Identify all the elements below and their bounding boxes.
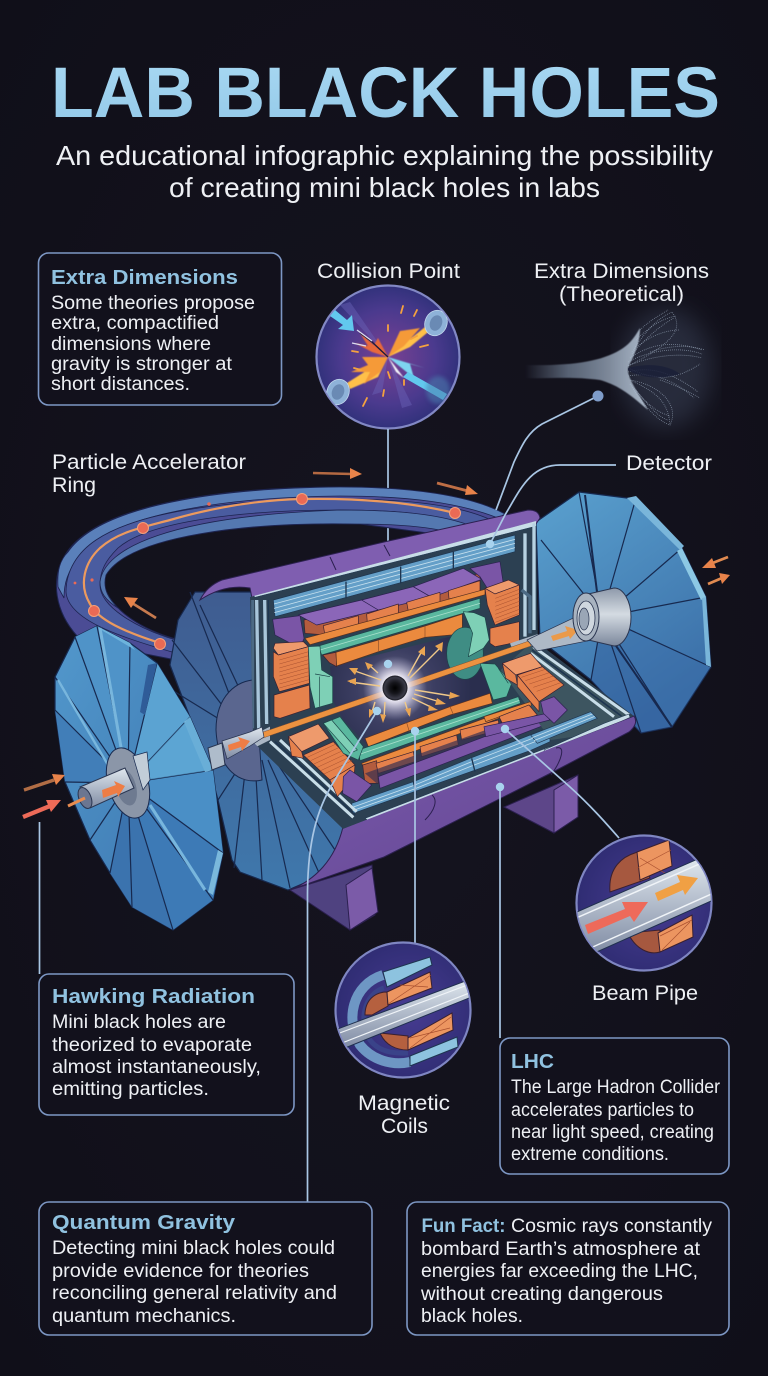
panel: extra dimensions: extra, compactified bbox=[51, 313, 219, 334]
label: detector: Detector bbox=[626, 451, 712, 475]
panel: lhc: extreme conditions. bbox=[511, 1144, 669, 1165]
particle accelerator ring bbox=[56, 487, 505, 660]
right rails bbox=[531, 647, 629, 717]
hub bbox=[99, 743, 157, 823]
panel: quantum gravity: Quantum Gravity bbox=[52, 1212, 236, 1234]
panel: fun fact bbox=[407, 1202, 729, 1335]
label: magnetic coils bbox=[358, 1091, 450, 1138]
support legs bbox=[290, 775, 578, 930]
panel: hawking radiation: emitting particles. bbox=[52, 1079, 209, 1100]
panel: fun fact: bombard Earth’s atmosphere at bbox=[421, 1239, 701, 1260]
subtitle bbox=[56, 140, 713, 203]
lower long orange coil bbox=[365, 693, 492, 747]
chamber bbox=[330, 633, 497, 747]
inset: beam pipe bbox=[570, 836, 720, 970]
panel: lhc: The Large Hadron Collider bbox=[511, 1077, 721, 1098]
panel: quantum gravity: quantum mechanics. bbox=[52, 1306, 236, 1327]
detector cylinder: purple hull bbox=[200, 510, 636, 890]
detector interior cutaway bbox=[250, 520, 634, 829]
subtitle: of creating mini black holes in labs bbox=[169, 172, 600, 203]
label: particle accelerator ring bbox=[52, 450, 246, 497]
thin coil extension bbox=[484, 702, 531, 722]
label: extra dimensions theoretical: Extra Dimensions bbox=[534, 259, 709, 283]
left side rails bbox=[253, 600, 270, 728]
label: extra dimensions theoretical: (Theoretical) bbox=[559, 282, 684, 306]
lower slats bbox=[352, 727, 550, 813]
panel: extra dimensions: Extra Dimensions bbox=[51, 267, 238, 289]
lower right section of the interior bbox=[484, 643, 631, 753]
upper slats bbox=[273, 535, 515, 617]
left lower rails bbox=[270, 740, 357, 817]
back left detector end-cap fan bbox=[170, 592, 345, 890]
panel: hawking radiation bbox=[39, 974, 294, 1115]
label: collision point: Collision Point bbox=[317, 259, 460, 283]
lower green band and thin coil bbox=[358, 697, 530, 783]
right detector end-cap fan bbox=[536, 492, 711, 733]
panel: extra dimensions: gravity is stronger at bbox=[51, 354, 233, 375]
panel: extra dimensions: Some theories propose bbox=[51, 293, 255, 314]
right green ring bbox=[447, 612, 512, 700]
upper inner green band bbox=[318, 598, 480, 655]
panel: fun fact: Fun Fact: bbox=[422, 1216, 506, 1237]
panel: quantum gravity: Detecting mini black holes could bbox=[52, 1238, 335, 1259]
upper long orange coil bbox=[323, 614, 462, 667]
right slats bbox=[531, 712, 597, 743]
label: particle accelerator ring: Ring bbox=[52, 473, 96, 497]
panel: quantum gravity: provide evidence for theories bbox=[52, 1261, 309, 1282]
panel: fun fact: energies far exceeding the LHC, bbox=[421, 1261, 698, 1282]
purple bar extension bbox=[484, 713, 550, 737]
right side rails bbox=[522, 523, 534, 637]
leader dots bbox=[373, 390, 604, 791]
panel: lhc: LHC bbox=[511, 1051, 554, 1073]
inset: magnetic coils bbox=[335, 942, 474, 1078]
panel: hawking radiation: Mini black holes are bbox=[52, 1012, 226, 1033]
panel: lhc: near light speed, creating bbox=[511, 1122, 714, 1143]
input arrows bbox=[23, 774, 65, 817]
panel: hawking radiation: Hawking Radiation bbox=[52, 986, 255, 1008]
inset: collision point bbox=[316, 286, 460, 428]
lower rail bbox=[365, 747, 550, 822]
panel: fun fact: without creating dangerous bbox=[420, 1284, 663, 1305]
panel: extra dimensions: dimensions where bbox=[51, 334, 211, 355]
lower left magnets bbox=[288, 717, 372, 802]
label: particle accelerator ring: Particle Accelerator bbox=[52, 450, 246, 474]
arrows on the right bbox=[702, 557, 730, 584]
title: LAB BLACK HOLES bbox=[51, 54, 720, 133]
arrow: ring flow bbox=[124, 597, 156, 618]
blue incoming arrow bbox=[330, 310, 354, 331]
mini black hole with radiating particles bbox=[347, 642, 460, 723]
beam pipe left and front end-cap bbox=[55, 626, 264, 930]
panel: fun fact: Cosmic rays constantly bbox=[511, 1216, 713, 1237]
panel: quantum gravity bbox=[39, 1202, 372, 1335]
upper magnet blocks bbox=[298, 568, 485, 645]
pipe bbox=[80, 768, 134, 808]
far right bricks bbox=[498, 704, 538, 723]
lower bricks bbox=[365, 720, 502, 784]
panel: quantum gravity: reconciling general relativity and bbox=[52, 1283, 337, 1304]
right magnets bbox=[470, 562, 519, 647]
subtitle: An educational infographic explaining the possibility bbox=[56, 140, 713, 171]
panel: extra dimensions: short distances. bbox=[51, 374, 190, 395]
beam pipe right and hub bbox=[527, 588, 631, 651]
label: magnetic coils: Magnetic bbox=[358, 1091, 450, 1115]
panel: lhc bbox=[500, 1038, 729, 1174]
beam tube bbox=[254, 634, 538, 746]
lower purple bar bbox=[378, 723, 542, 788]
label: extra dimensions theoretical bbox=[534, 259, 709, 306]
visual: extra dimensions funnel bbox=[525, 308, 712, 428]
panel: lhc: accelerates particles to bbox=[511, 1100, 694, 1121]
upper rail bbox=[252, 520, 537, 597]
left magnets bbox=[273, 616, 333, 718]
leader lines bbox=[40, 396, 619, 1202]
panel: extra dimensions bbox=[38, 253, 282, 405]
label: beam pipe: Beam Pipe bbox=[592, 981, 698, 1005]
panel: hawking radiation: theorized to evaporate bbox=[52, 1035, 252, 1056]
panel: hawking radiation: almost instantaneously, bbox=[52, 1057, 261, 1078]
panel: fun fact: black holes. bbox=[421, 1306, 523, 1327]
right rail bbox=[544, 714, 630, 753]
label: magnetic coils: Coils bbox=[381, 1114, 428, 1138]
right magnets bbox=[502, 653, 542, 675]
flow arrows above the ring bbox=[313, 468, 478, 495]
leader: collision point bbox=[387, 429, 389, 664]
